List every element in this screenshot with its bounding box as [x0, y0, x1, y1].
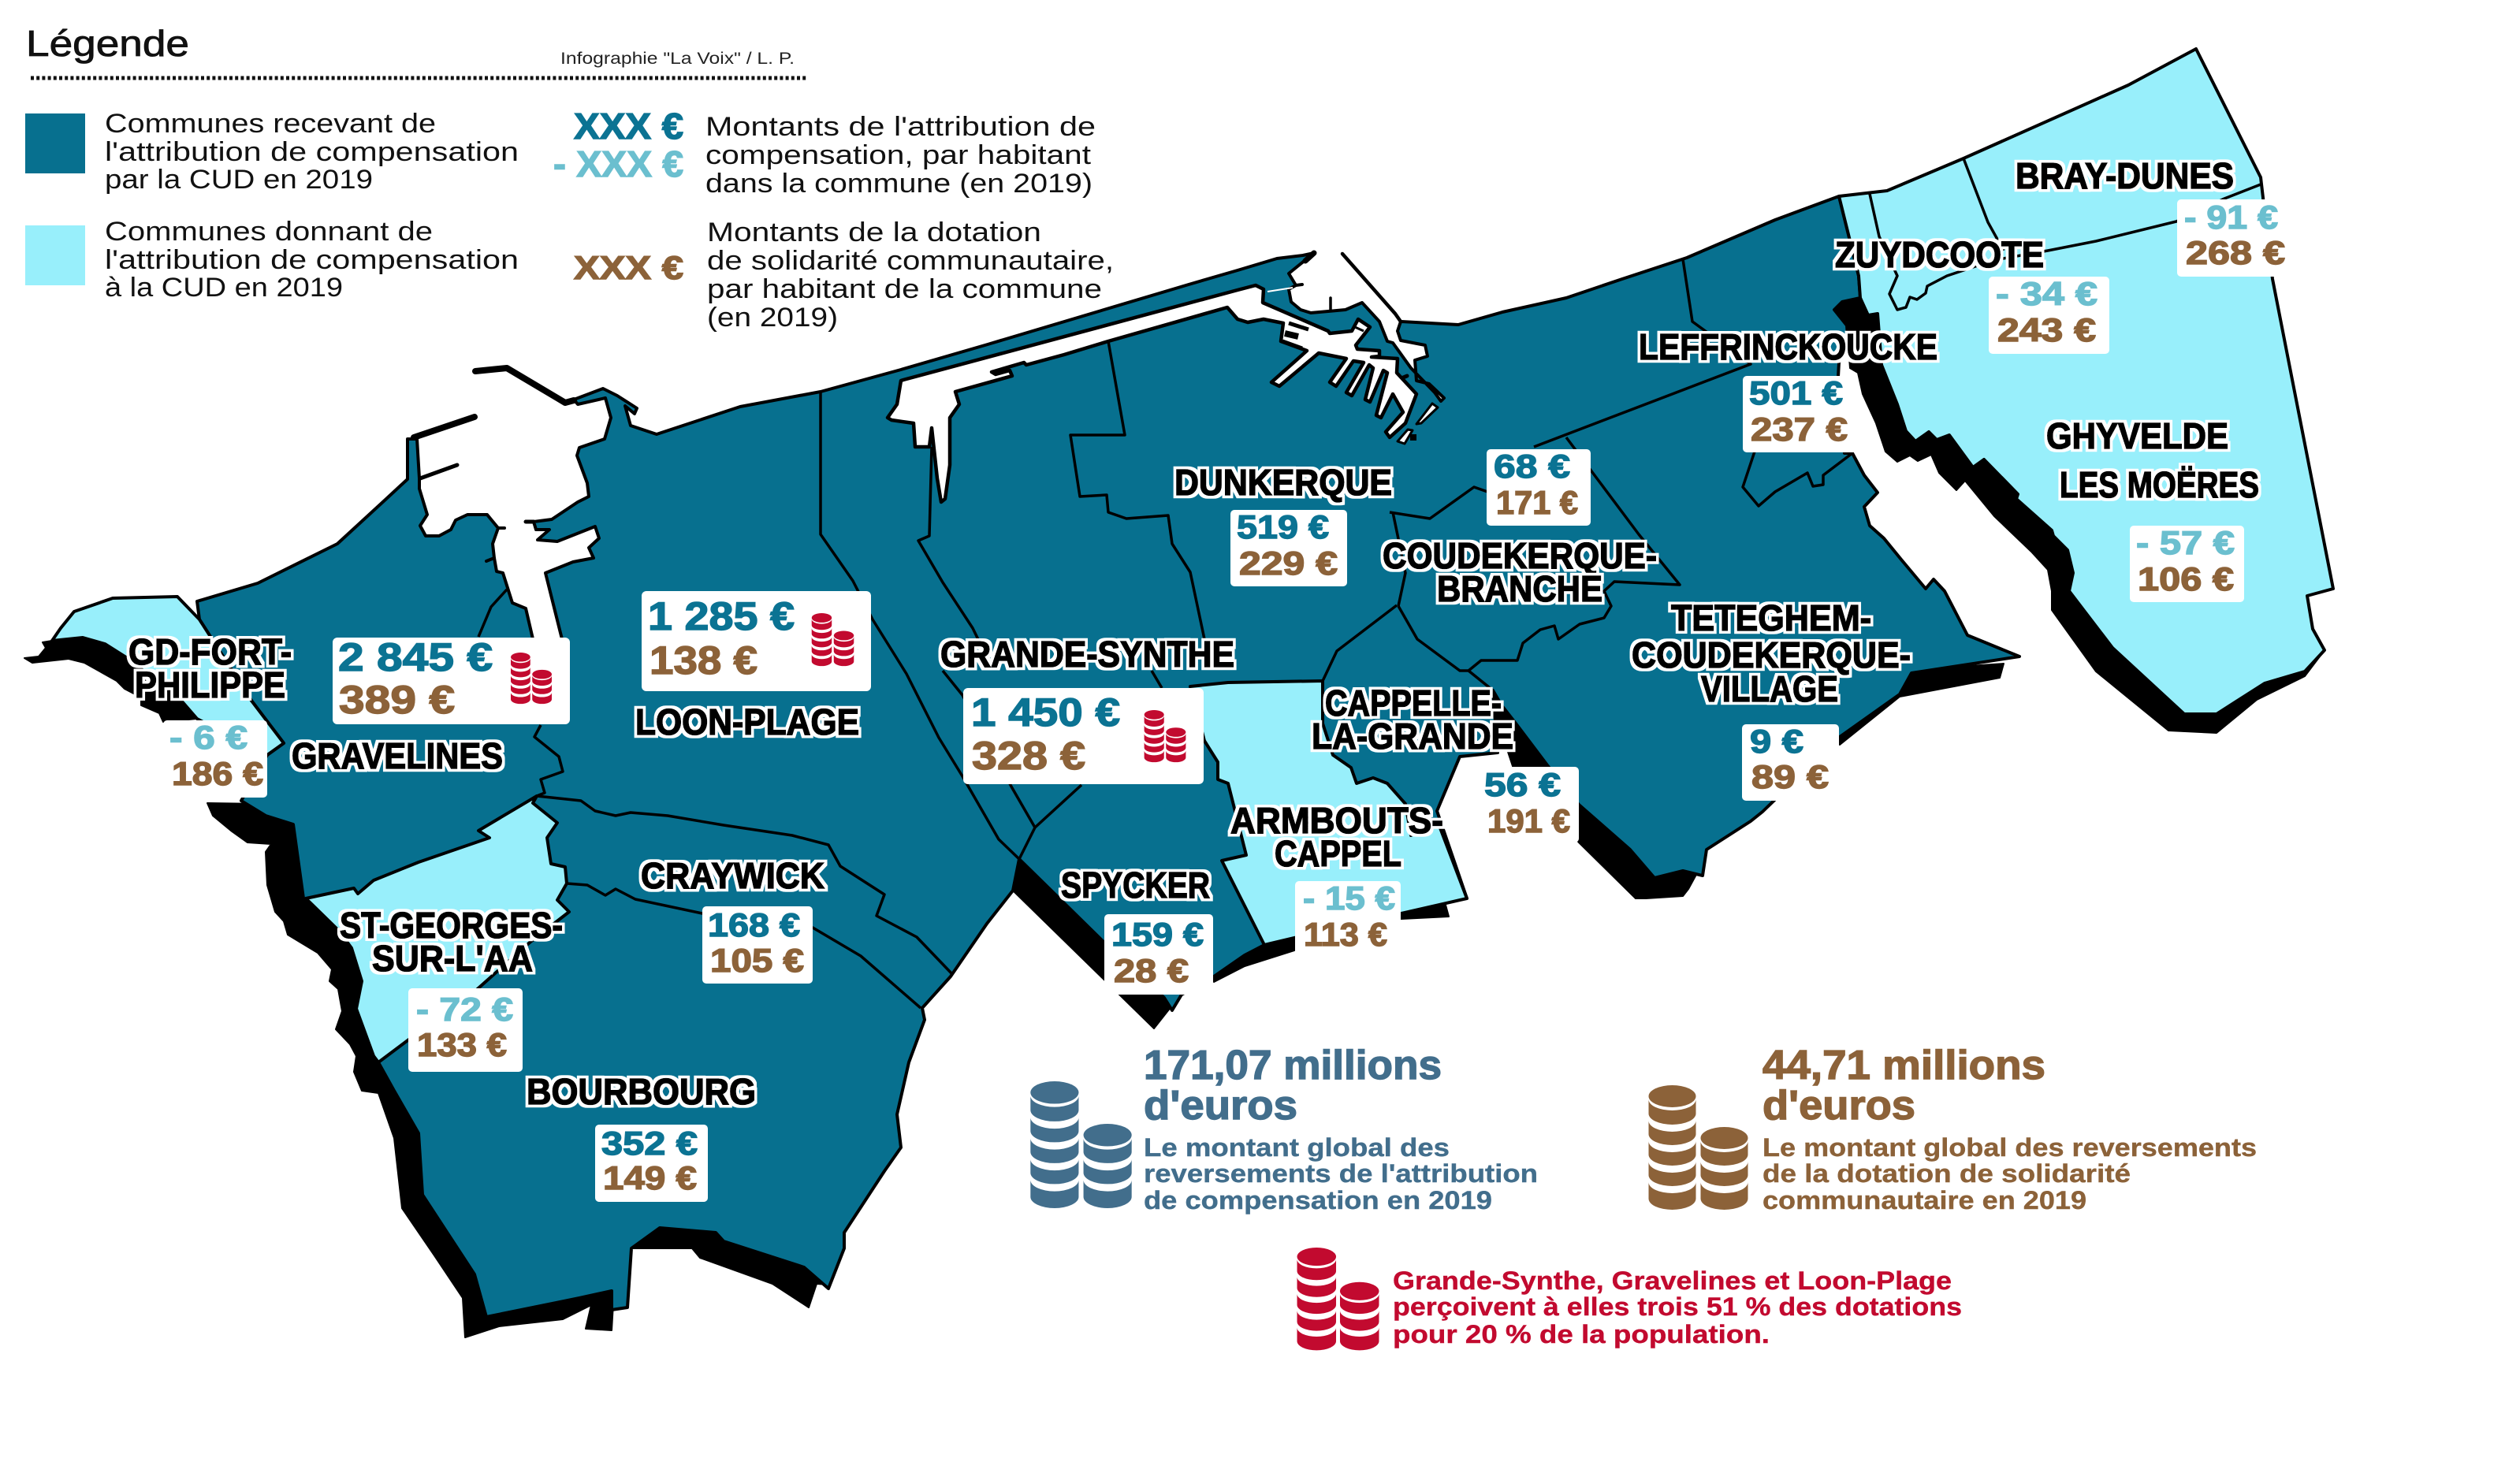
value box: Saint-Georges-sur-l'Aa: - 72 €: [416, 991, 513, 1028]
value box: Dunkerque: 229 €: [1239, 545, 1338, 582]
value box: Saint-Georges-sur-l'Aa: [408, 988, 523, 1072]
legend text: attribution amounts: dans la commune (en 2019): [705, 169, 1092, 199]
legend text: dotation amounts: par habitant de la commune: [707, 274, 1102, 304]
value box: Grande-Synthe: 328 €: [972, 734, 1085, 778]
value box: Dunkerque: 519 €: [1237, 508, 1329, 545]
land: receiving communes: [197, 196, 2019, 1317]
note: three communes: [1297, 1248, 1962, 1350]
legend text: giving communes: [105, 217, 519, 303]
value box: Cappelle-la-Grande: 56 €: [1484, 766, 1561, 803]
commune label: Grande-Synthe: GRANDE-SYNTHE: [940, 634, 1234, 675]
stat: dotation total: [1649, 1043, 2257, 1214]
commune label: Gravelines: GRAVELINES: [292, 735, 503, 776]
value box: Zuydcoote: [1989, 275, 2109, 354]
legend swatch: receiving communes: [25, 113, 85, 173]
commune label: Gd-Fort-Philippe: PHILIPPE: [135, 664, 285, 705]
legend text: dotation amounts: (en 2019): [707, 303, 838, 333]
commune label: Ghyvelde: GHYVELDE: [2046, 415, 2228, 456]
legend text: giving communes: Communes donnant de: [105, 217, 433, 247]
icon: red coins: [1145, 710, 1186, 762]
value box: Spycker: [1104, 914, 1213, 995]
note: three communes: pour 20 % de la population.: [1393, 1320, 1770, 1348]
value box: Grande-Synthe: 1 450 €: [971, 690, 1120, 735]
legend title: Légende: [26, 23, 189, 64]
stat: dotation total: d'euros: [1763, 1083, 1915, 1129]
commune label: Leffrinckoucke: LEFFRINCKOUCKE: [1639, 326, 1937, 367]
commune boundaries: [478, 158, 2261, 1008]
commune label: St-Georges-sur-l'Aa: SUR-L'AA: [372, 938, 533, 979]
commune label: Gd-Fort-Philippe: [128, 631, 292, 705]
commune: Saint-Georges-sur-l'Aa: [306, 796, 569, 1062]
stat: attribution total: reversements de l'attribution: [1144, 1159, 1538, 1188]
note: three communes: perçoivent à elles trois 51 % des dotations: [1393, 1292, 1962, 1321]
value box: Grande-Synthe: [963, 688, 1204, 784]
commune label: Coudekerque-Branche: COUDEKERQUE-: [1383, 535, 1657, 576]
value box: Spycker: 159 €: [1111, 916, 1204, 953]
value box: Gravelines: 389 €: [339, 678, 455, 722]
commune: Grand-Fort-Philippe: [52, 597, 284, 755]
communes: Zuydcoote, Bray-Dunes, Ghyvelde-Les Moëres: [1839, 49, 2333, 714]
value box: Grand-Fort-Philippe: [163, 719, 267, 798]
value box: Dunkerque: [1230, 508, 1347, 586]
legend text: dotation amounts: de solidarité communautaire,: [707, 246, 1114, 276]
port dock details: [1282, 323, 1438, 444]
note: three communes: Grande-Synthe, Gravelines et Loon-Plage: [1393, 1266, 1952, 1295]
commune label: Coudekerque-Branche: BRANCHE: [1437, 568, 1602, 609]
legend sample amount: dotation: XXX €: [574, 249, 683, 286]
commune label: Teteghem-Coudekerque-Village: TETEGHEM-: [1671, 597, 1871, 638]
value box: Cappelle-la-Grande: 191 €: [1487, 802, 1570, 839]
value box: Craywick: [702, 906, 813, 984]
value box: Craywick: 168 €: [708, 906, 800, 943]
value box: Gravelines: 2 845 €: [338, 635, 493, 679]
stat: dotation total: communautaire en 2019: [1763, 1186, 2086, 1214]
value box: Grand-Fort-Philippe: - 6 €: [169, 719, 248, 756]
black coastal shadows: [24, 298, 2325, 1337]
stat: dotation total: Le montant global des reversements: [1763, 1133, 2257, 1162]
value box: Gravelines: [333, 635, 570, 724]
value box: Saint-Georges-sur-l'Aa: 133 €: [417, 1026, 507, 1063]
value box: Teteghem-Coudekerque-Village: [1742, 723, 1839, 801]
commune label: St-Georges-sur-l'Aa: [340, 905, 563, 979]
commune label: Armbouts-Cappel: CAPPEL: [1275, 833, 1401, 874]
commune label: Armbouts-Cappel: ARMBOUTS-: [1230, 800, 1443, 841]
legend text: receiving communes: par la CUD en 2019: [105, 165, 373, 195]
value box: Zuydcoote: - 34 €: [1996, 275, 2098, 312]
value box: Armbouts-Cappel: [1295, 880, 1401, 958]
stat: attribution total: Le montant global des: [1144, 1133, 1450, 1162]
legend text: receiving communes: Communes recevant de: [105, 109, 436, 139]
icon: red coins: [1297, 1248, 1379, 1350]
value box: Zuydcoote: 243 €: [1997, 311, 2096, 348]
legend text: attribution amounts: Montants de l'attribution de: [705, 112, 1096, 142]
value box: Armbouts-Cappel: 113 €: [1304, 916, 1387, 953]
icon: brown coins: [1649, 1085, 1748, 1210]
value box: Loon-Plage: 1 285 €: [648, 594, 795, 638]
stat: attribution total: [1030, 1043, 1538, 1214]
value box: Loon-Plage: [642, 591, 871, 691]
commune label: Zuydcoote: ZUYDCOOTE: [1835, 234, 2044, 275]
commune label: Cappelle-la-Grande: CAPPELLE-: [1325, 682, 1502, 723]
commune label: Spycker: SPYCKER: [1061, 865, 1210, 906]
stat: attribution total: de compensation en 2019: [1144, 1186, 1492, 1214]
value box: Leffrinckoucke: [1743, 374, 1857, 452]
value box: Teteghem-Coudekerque-Village: 9 €: [1750, 723, 1803, 760]
legend swatch: giving communes: [25, 225, 85, 285]
commune label: Bray-Dunes: BRAY-DUNES: [2016, 155, 2234, 196]
stat: attribution total: 171,07 millions: [1144, 1043, 1442, 1088]
legend text: dotation amounts: [707, 218, 1114, 333]
stat: dotation total: de la dotation de solidarité: [1763, 1159, 2131, 1188]
value box: Loon-Plage: 138 €: [650, 638, 757, 682]
value box: Armbouts-Cappel: - 15 €: [1303, 880, 1395, 917]
legend text: receiving communes: [105, 109, 519, 195]
commune label: Teteghem-Coudekerque-Village: COUDEKERQUE-: [1632, 634, 1911, 675]
value box: Ghyvelde - Les Moëres: 106 €: [2138, 560, 2234, 597]
legend text: giving communes: l'attribution de compensation: [105, 245, 519, 275]
stat: dotation total: 44,71 millions: [1763, 1043, 2045, 1088]
commune label: St-Georges-sur-l'Aa: ST-GEORGES-: [340, 905, 563, 946]
commune label: Coudekerque-Branche: [1383, 535, 1657, 609]
commune label: Loon-Plage: LOON-PLAGE: [635, 701, 859, 742]
credit: Infographie "La Voix" / L. P.: [560, 50, 795, 68]
legend: [25, 23, 1114, 333]
icon: red coins: [812, 613, 854, 666]
legend text: attribution amounts: [705, 112, 1096, 199]
commune label: Craywick: CRAYWICK: [641, 855, 824, 896]
value box: Bourbourg: [595, 1125, 708, 1202]
value box: Grand-Fort-Philippe: 186 €: [172, 755, 263, 792]
value box: Coudekerque-Branche: 171 €: [1496, 484, 1578, 521]
value box: Cappelle-la-Grande: [1480, 766, 1579, 842]
legend text: dotation amounts: Montants de la dotation: [707, 218, 1041, 247]
value box: Leffrinckoucke: 501 €: [1749, 374, 1843, 411]
value box: Ghyvelde - Les Moëres: - 57 €: [2136, 524, 2235, 561]
value box: Leffrinckoucke: 237 €: [1751, 411, 1848, 448]
commune label: Teteghem-Coudekerque-Village: [1632, 597, 1911, 709]
commune label: Cappelle-la-Grande: LA-GRANDE: [1312, 716, 1513, 757]
commune label: Teteghem-Coudekerque-Village: VILLAGE: [1701, 668, 1838, 709]
value box: Coudekerque-Branche: 68 €: [1494, 448, 1570, 485]
value box: Teteghem-Coudekerque-Village: 89 €: [1751, 758, 1829, 795]
value box: Bray-Dunes: [2177, 199, 2292, 277]
legend text: receiving communes: l'attribution de compensation: [105, 137, 519, 167]
value box: Bourbourg: 352 €: [601, 1125, 698, 1162]
Dunkerque port basin: [888, 285, 1416, 502]
stat: attribution total: d'euros: [1144, 1083, 1297, 1129]
value box: Bray-Dunes: 268 €: [2186, 234, 2285, 271]
legend text: attribution amounts: compensation, par habitant: [705, 140, 1092, 170]
harbour jetties: [414, 253, 1407, 561]
value box: Ghyvelde - Les Moëres: [2130, 524, 2244, 602]
map: [24, 49, 2333, 1337]
icon: blue coins: [1030, 1081, 1132, 1208]
value box: Craywick: 105 €: [710, 942, 804, 979]
legend sample amounts: attribution: XXX €: [574, 106, 683, 147]
value box: Coudekerque-Branche: [1487, 448, 1591, 526]
value box: Bourbourg: 149 €: [603, 1159, 697, 1196]
commune label: Armbouts-Cappel: [1230, 800, 1443, 874]
icon: red coins: [511, 653, 552, 704]
commune: Armbouts-Cappel: [1190, 681, 1467, 945]
commune label: Les Moëres: LES MOËRES: [2060, 464, 2259, 505]
commune label: Cappelle-la-Grande: [1312, 682, 1513, 757]
commune label: Dunkerque: DUNKERQUE: [1174, 462, 1392, 503]
commune label: Gd-Fort-Philippe: GD-FORT-: [128, 631, 292, 672]
value box: Spycker: 28 €: [1114, 952, 1189, 989]
commune label: Bourbourg: BOURBOURG: [527, 1071, 756, 1112]
value box: Bray-Dunes: - 91 €: [2184, 199, 2278, 236]
legend sample amounts: attribution: [553, 106, 683, 184]
legend text: giving communes: à la CUD en 2019: [105, 273, 343, 303]
legend sample amounts: attribution: - XXX €: [553, 143, 683, 184]
